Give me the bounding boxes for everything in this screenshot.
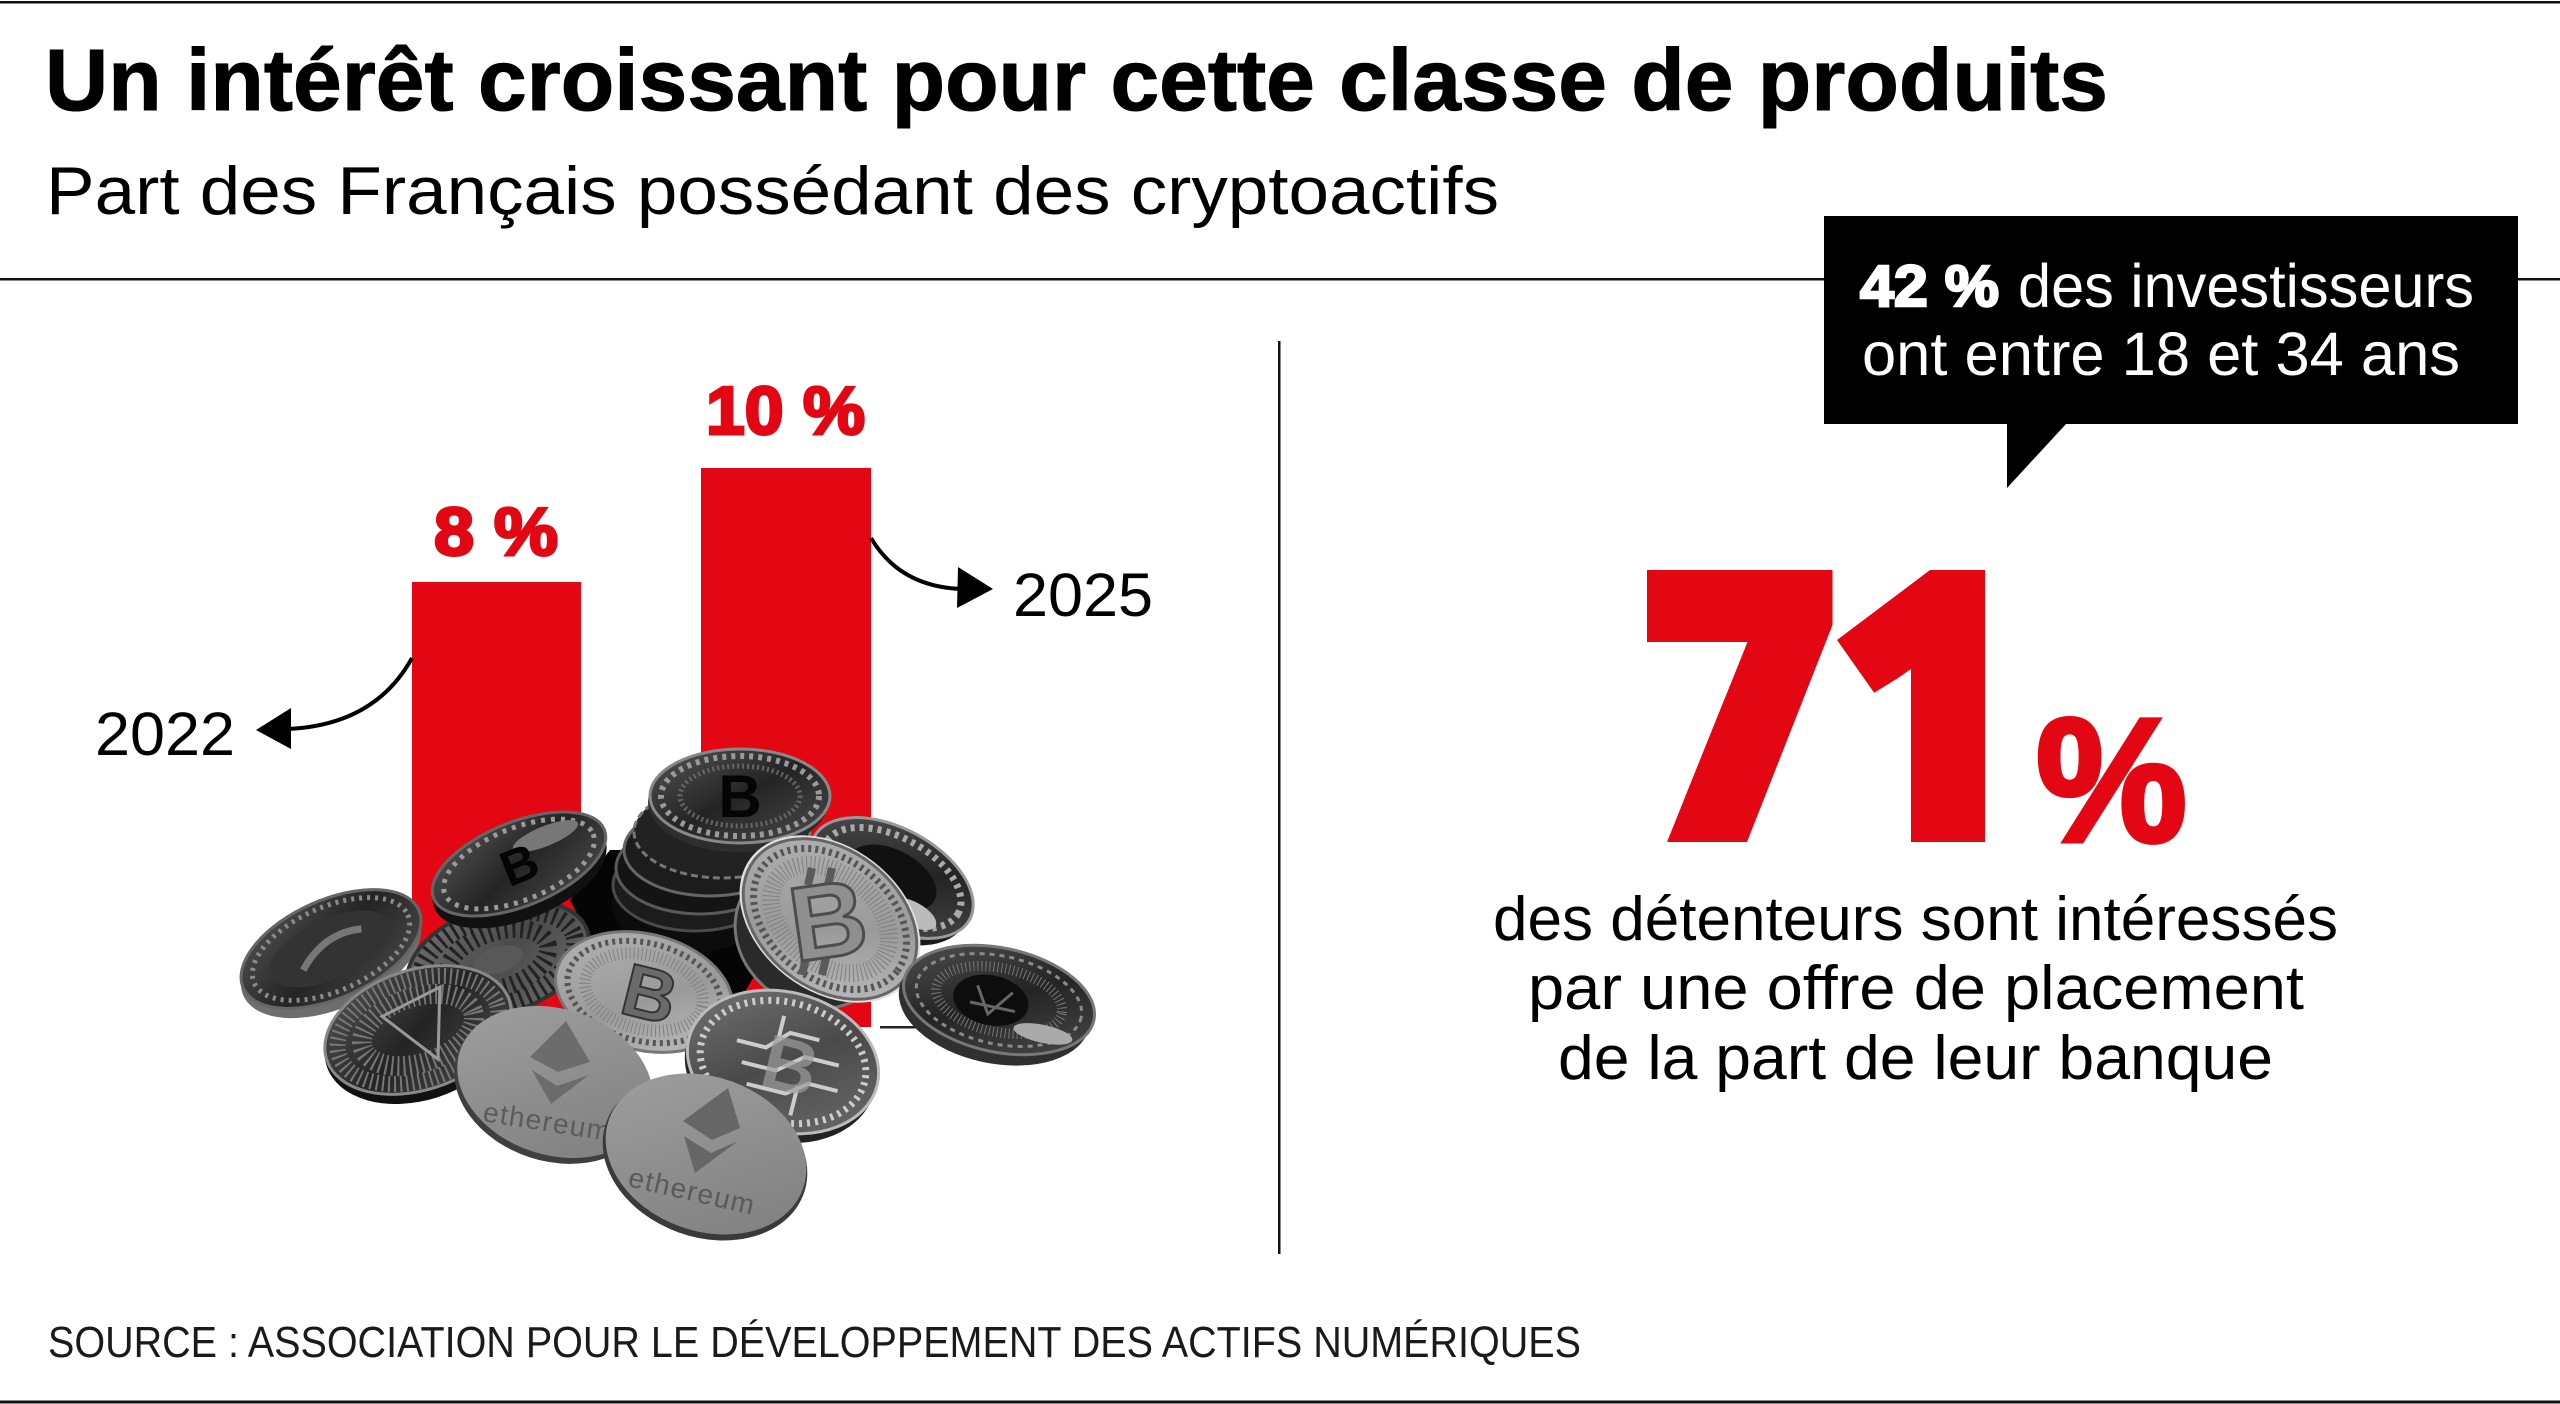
coin glyph: B bbox=[718, 763, 762, 830]
coin: wave pattern bbox=[392, 880, 604, 1040]
year label: 2025: 2025 bbox=[1013, 561, 1153, 629]
big figure: 71 % bbox=[1647, 570, 2185, 845]
value: 10 %: 10 % bbox=[706, 373, 865, 449]
year label: 2022: 2022 bbox=[95, 700, 235, 768]
shadow between coins bbox=[570, 850, 770, 1000]
illustration: pile of crypto coins bbox=[221, 749, 1105, 1268]
bar chart bbox=[95, 373, 1153, 1027]
bar: 2022 bbox=[412, 582, 581, 1027]
coin: dark left bbox=[221, 865, 443, 1043]
coin: behind large bitcoin bbox=[706, 832, 918, 1038]
description text: par une offre de placement bbox=[1528, 954, 2304, 1023]
description text: des détenteurs sont intéressés bbox=[1493, 885, 2338, 954]
arrow: 2022 bbox=[256, 658, 412, 749]
title: Un intérêt croissant pour cette classe de produits bbox=[45, 32, 2108, 129]
coin lettering: ethereum bbox=[626, 1162, 757, 1221]
number 71 bbox=[1647, 570, 1985, 842]
coin glyph: B bbox=[614, 947, 686, 1041]
coin: right behind bbox=[784, 792, 993, 972]
percent sign: % bbox=[2036, 683, 2187, 879]
coin: top-left bitcoin bbox=[415, 791, 625, 951]
ethereum diamond bbox=[530, 1021, 590, 1104]
bar: 2025 bbox=[701, 468, 871, 1027]
arrow: 2025 bbox=[871, 538, 993, 608]
callout text line 1: des investisseurs bbox=[2018, 252, 2474, 320]
coin: large bitcoin bbox=[707, 801, 953, 1037]
value: 8 %: 8 % bbox=[434, 494, 558, 570]
coin stack bbox=[612, 749, 830, 953]
source: SOURCE : ASSOCIATION POUR LE DÉVELOPPEMENT DES ACTIFS NUMÉRIQUES bbox=[48, 1318, 1581, 1367]
callout figure: 42 % bbox=[1860, 254, 1999, 319]
callout: investors 18-34 bbox=[1824, 216, 2518, 488]
coin glyph: B bbox=[782, 857, 874, 985]
subtitle: Part des Français possédant des cryptoactifs bbox=[46, 153, 1499, 229]
coin: ethereum left bbox=[434, 982, 673, 1189]
coin: middle bitcoin bbox=[543, 914, 745, 1070]
coin: right dark bbox=[888, 928, 1105, 1083]
coin: triangle pattern bbox=[306, 943, 531, 1127]
callout text line 2: ont entre 18 et 34 ans bbox=[1862, 320, 2460, 388]
coin: circuit bitcoin bbox=[669, 970, 894, 1163]
description text bbox=[1493, 885, 2338, 1093]
coin glyph: B bbox=[753, 1018, 827, 1114]
description text: de la part de leur banque bbox=[1558, 1024, 2273, 1093]
ethereum diamond bbox=[683, 1088, 740, 1173]
number 71: 7 bbox=[1625, 502, 1836, 927]
coin: ethereum front bbox=[579, 1046, 831, 1268]
coin lettering: ethereum bbox=[481, 1096, 612, 1147]
coin glyph: B bbox=[492, 832, 547, 898]
number 71: 1 bbox=[1835, 502, 2046, 927]
